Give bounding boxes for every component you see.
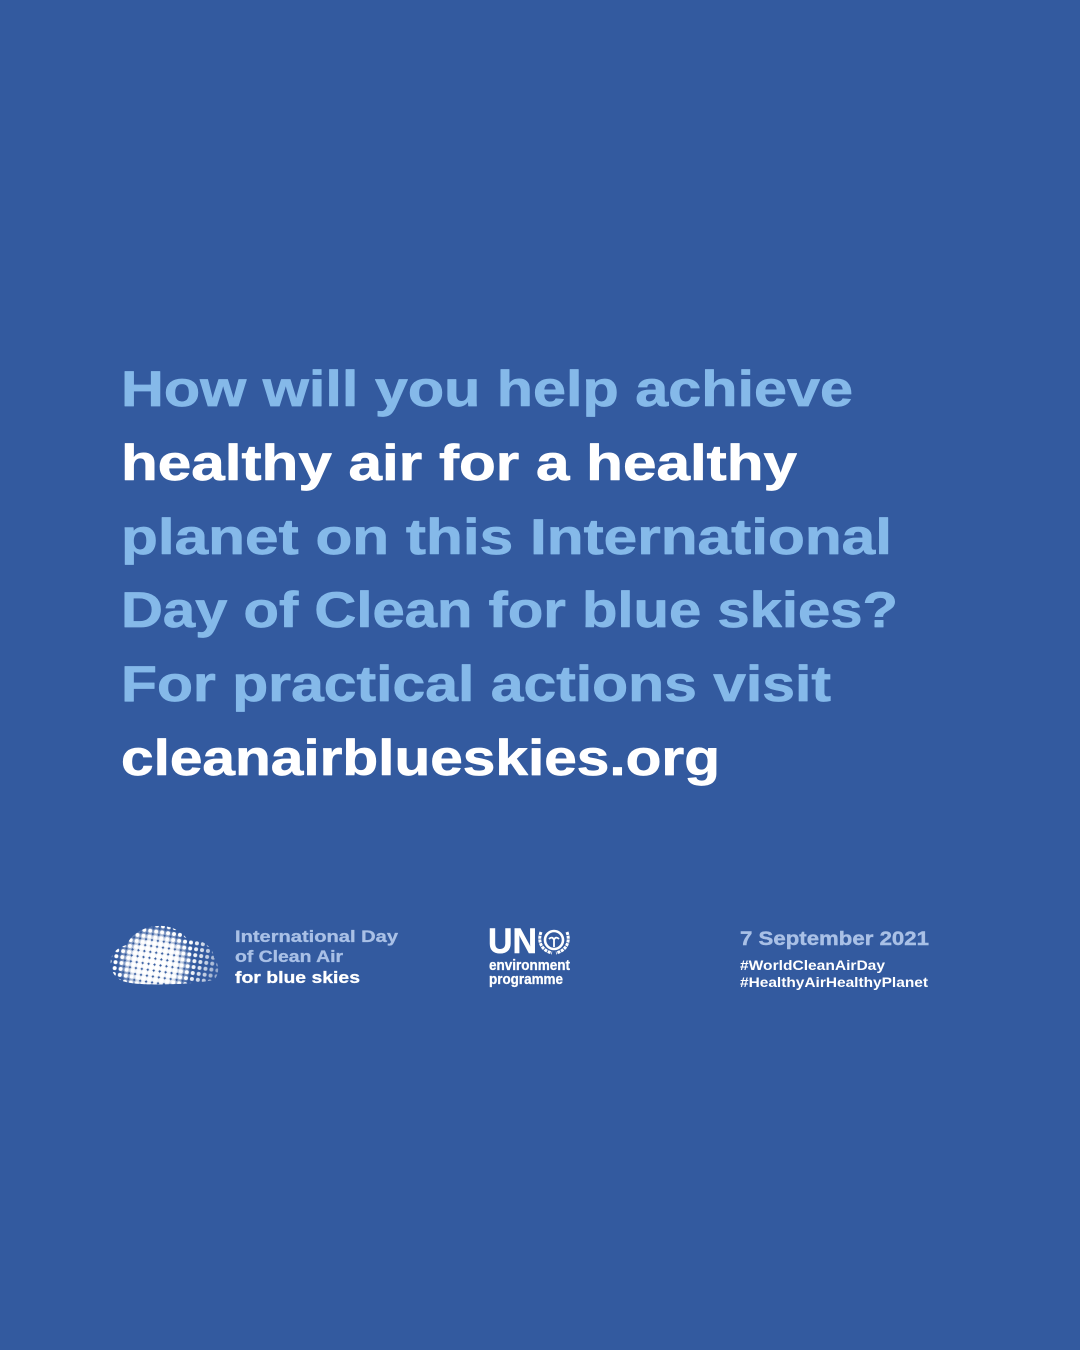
headline: For practical actions visit [121, 656, 831, 712]
UN environment programme logo: programme [489, 971, 563, 988]
headline: How will you help achieve [121, 361, 853, 417]
headline [121, 361, 898, 786]
campaign name text: International Day [235, 927, 399, 946]
date and hashtags [740, 929, 930, 990]
headline: cleanairblueskies.org [121, 730, 720, 786]
campaign name text: of Clean Air [235, 947, 343, 966]
headline: Day of Clean for blue skies? [121, 582, 898, 638]
date and hashtags: #WorldCleanAirDay [740, 957, 885, 973]
programme words: environment [489, 957, 570, 974]
campaign name text [235, 927, 399, 987]
date and hashtags: #HealthyAirHealthyPlanet [740, 974, 928, 990]
headline: planet on this International [121, 509, 892, 565]
date and hashtags: 7 September 2021 [740, 929, 930, 950]
headline: healthy air for a healthy [121, 435, 797, 491]
campaign name text: for blue skies [235, 968, 360, 987]
icon: dotted cloud logo [110, 926, 218, 984]
icon: UN emblem [540, 931, 568, 953]
UN environment programme logo [488, 922, 570, 988]
UN letters: UN [488, 922, 537, 961]
